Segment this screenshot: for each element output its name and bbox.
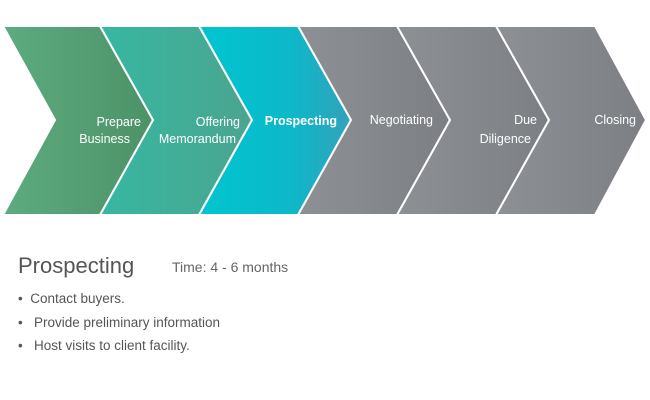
process chevrons [4, 27, 645, 214]
chevron: Negotiating: Negotiating [370, 113, 433, 127]
chevron: Offering Memorandum: Offering [196, 115, 240, 129]
chevron: Prepare Business [3, 26, 153, 215]
stage heading: Prospecting [18, 253, 134, 278]
bullet list: • Provide preliminary information [18, 314, 220, 330]
chevron: Offering Memorandum: Memorandum [159, 132, 236, 146]
bullet list [18, 291, 220, 353]
chevron: Prospecting (active): Prospecting [265, 114, 337, 128]
chevron: Prepare Business: Prepare [97, 115, 141, 129]
chevron: Due Diligence: Due [514, 113, 537, 127]
bullet list: • Host visits to client facility. [18, 338, 190, 353]
chevron: Prepare Business: Business [79, 132, 130, 146]
chevron: Negotiating [298, 26, 450, 215]
chevron: Offering Memorandum [100, 26, 252, 215]
bullet list: • Contact buyers. [18, 291, 125, 306]
chevron: Closing: Closing [594, 113, 636, 127]
chevron: Due Diligence: Diligence [480, 132, 531, 146]
chevron: Closing [496, 26, 646, 215]
chevron: Prospecting (active) [199, 26, 351, 215]
chevron: Due Diligence [397, 26, 549, 215]
time label: Time: 4 - 6 months [172, 259, 288, 275]
